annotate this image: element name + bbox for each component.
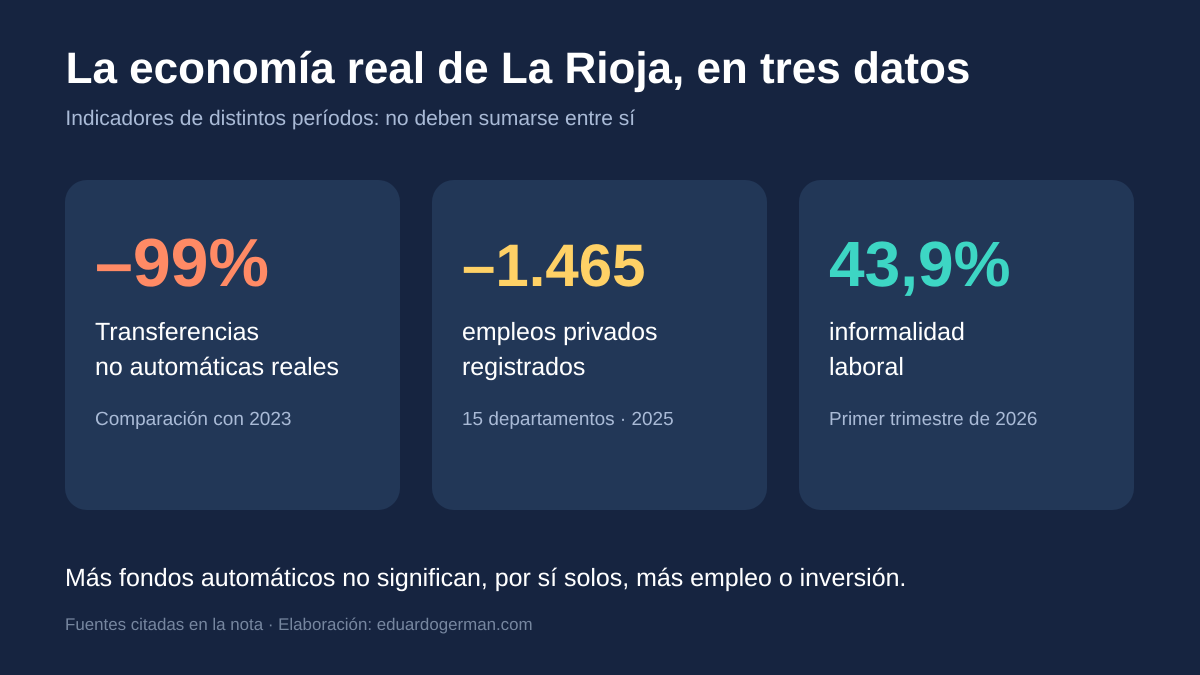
- source note: Fuentes citadas en la nota · Elaboración: eduardogerman.com: [65, 615, 533, 634]
- stat: -1.465: –1.465: [462, 232, 646, 299]
- stat label: no automáticas reales: [95, 353, 339, 381]
- stat: 43,9%: 43,9%: [829, 228, 1010, 300]
- stat label: Transferencias: [95, 318, 259, 346]
- stat label: laboral: [829, 353, 904, 381]
- stat note: Primer trimestre de 2026: [829, 409, 1037, 430]
- stat label: empleos privados: [462, 318, 657, 346]
- stat label: registrados: [462, 353, 585, 381]
- title: La economía real de La Rioja, en tres datos: [66, 44, 970, 93]
- stat note: Comparación con 2023: [95, 409, 291, 430]
- stat label: informalidad: [829, 318, 965, 346]
- conclusion: Más fondos automáticos no significan, por sí solos, más empleo o inversión.: [65, 564, 906, 592]
- panel: informalidad: [799, 180, 1134, 510]
- panel: empleo: [432, 180, 767, 510]
- subtitle: Indicadores de distintos períodos: no deben sumarse entre sí: [65, 107, 635, 130]
- panel: transferencias: [65, 180, 400, 510]
- stat: -99%: –99%: [95, 225, 269, 301]
- stat note: 15 departamentos · 2025: [462, 409, 674, 430]
